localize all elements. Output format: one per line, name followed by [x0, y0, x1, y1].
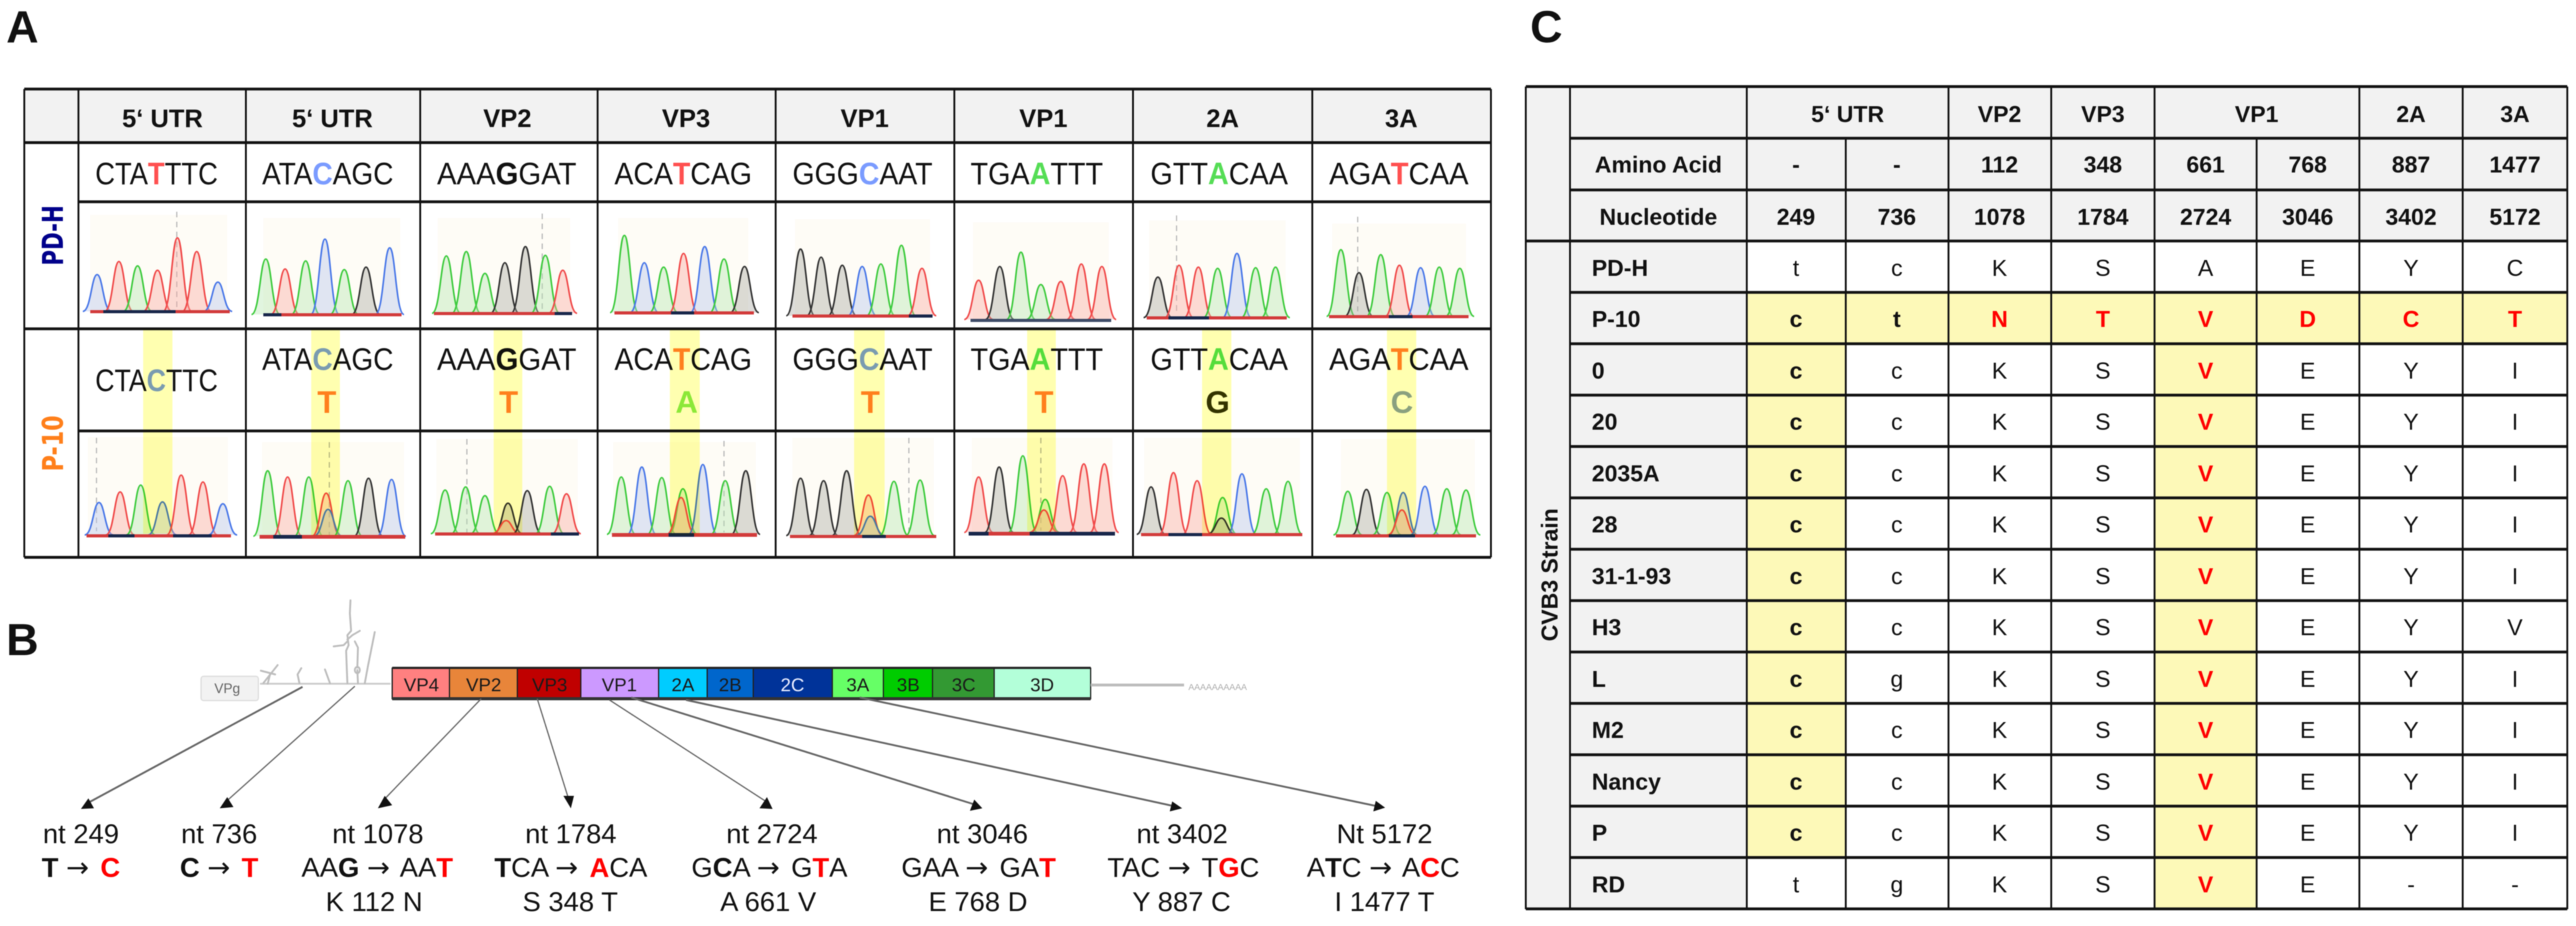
row 31-1-93: K [1992, 564, 2008, 589]
row L: V [2198, 666, 2214, 692]
chromatogram PD-H VP1 nt 2724 [786, 219, 936, 318]
row P: I [2512, 820, 2518, 846]
column headers: 2A [1206, 104, 1239, 133]
mutation nt 2724: nt 2724 [726, 819, 817, 849]
nucleotide row: 3046 [2282, 204, 2333, 230]
mutation nt 3046: nt 3046 [937, 819, 1028, 849]
P-10 substituted bases: T [499, 385, 518, 420]
mutation nt 3046: E 768 D [929, 887, 1027, 917]
row P-10: N [1991, 306, 2008, 332]
chromatogram P-10 VP1 nt 3046 [964, 438, 1119, 536]
nucleotide row: 2724 [2180, 204, 2232, 230]
row 0: V [2198, 358, 2214, 384]
amino acid row [1595, 152, 2541, 177]
row 31-1-93: Y [2404, 564, 2419, 589]
amino acid row: 1477 [2489, 152, 2541, 177]
mutation nt 736: nt 736 [181, 819, 257, 849]
row H3: V [2508, 615, 2523, 640]
row 28: Y [2404, 512, 2419, 537]
row 0: c [1790, 358, 1802, 384]
row 31-1-93: 31-1-93 [1592, 564, 1671, 589]
chromatogram P-10 VP3 [607, 441, 760, 537]
panel C: strain comparison table [1526, 2, 2567, 909]
arrow nt 3046 [631, 697, 982, 811]
row 0: c [1891, 358, 1902, 384]
row 31-1-93: E [2300, 564, 2315, 589]
row 31-1-93: c [1891, 564, 1902, 589]
PD-H sequences: CTATTTC [95, 156, 218, 191]
table C grid lines [1526, 87, 2567, 909]
mutation nt 249: nt 249 [43, 819, 119, 849]
row Nancy: S [2095, 769, 2110, 795]
polyprotein genome bar: VP3 [532, 675, 567, 696]
row 2035A: S [2095, 461, 2110, 486]
row P: V [2198, 820, 2214, 846]
row 0: E [2300, 358, 2315, 384]
amino acid row: Amino Acid [1595, 152, 1722, 177]
PD-H sequences: TGAATTT [971, 156, 1103, 191]
PD-H sequences: GTTACAA [1150, 156, 1289, 191]
mutation nt 1784: nt 1784 [525, 819, 616, 849]
mutation nt 5172: Nt 5172 [1337, 819, 1432, 849]
column headers: 3A [1385, 104, 1417, 133]
panel letter C: C [1530, 2, 1563, 52]
row 0: S [2095, 358, 2110, 384]
row M2 [1592, 717, 2518, 743]
VPg box [201, 676, 258, 701]
row PD-H: S [2095, 255, 2110, 281]
chromatogram PD-H VP3 [610, 218, 759, 314]
row 2035A: E [2300, 461, 2315, 486]
arrow nt 2724 [609, 700, 773, 809]
chromatogram P-10 VP2 [431, 439, 581, 536]
row RD [1592, 872, 2519, 897]
row H3: E [2300, 615, 2315, 640]
row H3: V [2198, 615, 2214, 640]
chromatogram PD-H 5'UTR nt 736 [251, 218, 404, 316]
column headers: VP2 [483, 104, 532, 133]
row 31-1-93: c [1790, 564, 1802, 589]
row Nancy: E [2300, 769, 2315, 795]
row 2035A: c [1790, 461, 1802, 486]
row L: E [2300, 666, 2315, 692]
row P-10: C [2403, 306, 2419, 332]
row PD-H: t [1793, 255, 1800, 281]
row P-10 [1592, 306, 2522, 332]
arrow nt 1784 [537, 699, 574, 808]
P-10 sequences: CTACTTC [95, 363, 218, 398]
gene region header row: VP3 [2081, 102, 2125, 127]
polyprotein genome bar: VP2 [466, 675, 501, 696]
amino acid row: - [1792, 152, 1800, 177]
arrow nt 3402 [686, 700, 1182, 811]
amino acid row: 661 [2186, 152, 2225, 177]
row 2035A: c [1891, 461, 1902, 486]
row 28: K [1992, 512, 2008, 537]
row RD: E [2300, 872, 2315, 897]
mutation nt 1078: nt 1078 [332, 819, 423, 849]
column headers: VP1 [840, 104, 889, 133]
row L: S [2095, 666, 2110, 692]
nucleotide row: 736 [1878, 204, 1916, 230]
row Nancy: c [1790, 769, 1802, 795]
row label P-10: P-10 [36, 415, 70, 471]
row P-10: t [1893, 306, 1901, 332]
row 31-1-93: S [2095, 564, 2110, 589]
vertical label CVB3 Strain: CVB3 Strain [1537, 508, 1563, 641]
gene region header row: 5ʻ UTR [1811, 102, 1884, 127]
row 28: V [2198, 512, 2214, 537]
polyprotein genome bar: 3C [952, 675, 975, 696]
mutation nt 1784: S 348 T [522, 887, 618, 917]
nucleotide row: 249 [1777, 204, 1815, 230]
row M2: V [2198, 717, 2214, 743]
row PD-H [1592, 255, 2523, 281]
PD-H sequences: AGATCAA [1329, 156, 1469, 191]
row PD-H: E [2300, 255, 2315, 281]
row PD-H: K [1992, 255, 2008, 281]
row Nancy: Nancy [1592, 769, 1661, 795]
column headers [122, 104, 1417, 133]
chromatogram P-10 5'UTR nt 249 [85, 437, 237, 537]
mutation nt 736 [180, 819, 258, 884]
row M2: c [1790, 717, 1802, 743]
table C shaded backgrounds [1526, 87, 2567, 909]
P-10 substituted bases: T [317, 385, 336, 420]
nucleotide row: 3402 [2386, 204, 2437, 230]
row L: L [1592, 666, 1606, 692]
panel letter A: A [6, 2, 39, 52]
amino acid row: 112 [1981, 152, 2018, 177]
row 0: K [1992, 358, 2008, 384]
mutation nt 1078: AAG → AAT [301, 852, 453, 884]
P-10 substituted bases: T [1035, 385, 1053, 420]
gene region header row: 2A [2396, 102, 2426, 127]
column headers: VP1 [1019, 104, 1068, 133]
gene region header row: VP2 [1978, 102, 2021, 127]
row 20: E [2300, 409, 2315, 435]
row P-10: V [2198, 306, 2214, 332]
mutation nt 2724 [692, 819, 848, 917]
nucleotide row: 1078 [1974, 204, 2025, 230]
row H3: Y [2404, 615, 2419, 640]
row P: c [1891, 820, 1902, 846]
row P: E [2300, 820, 2315, 846]
row PD-H: PD-H [1592, 255, 1648, 281]
row 31-1-93: V [2198, 564, 2214, 589]
row L: K [1992, 666, 2008, 692]
mutation nt 3402: Y 887 C [1132, 887, 1231, 917]
5' UTR stem loops [261, 600, 390, 684]
row 0: Y [2404, 358, 2419, 384]
row RD: g [1891, 872, 1903, 897]
row P-10: D [2300, 306, 2316, 332]
arrow nt 1078 [378, 699, 481, 808]
PD-H sequences: GGGCAAT [792, 156, 933, 191]
row P: Y [2404, 820, 2419, 846]
chromatogram PD-H 3A [1327, 217, 1474, 318]
PD-H sequences [95, 156, 1469, 191]
row RD: - [2511, 872, 2519, 897]
VPg box: VPg [214, 681, 240, 696]
row L: c [1790, 666, 1802, 692]
3' tail with poly-A: AAAAAAAAAA [1188, 682, 1248, 692]
row P-10: T [2508, 306, 2522, 332]
polyprotein genome bar [392, 668, 1091, 699]
row P: S [2095, 820, 2110, 846]
row P: P [1592, 820, 1607, 846]
row 31-1-93 [1592, 564, 2518, 589]
row M2: E [2300, 717, 2315, 743]
chromatogram PD-H VP1 nt 3046 [964, 222, 1116, 322]
row 28: c [1891, 512, 1902, 537]
mutation nt 1078 [301, 819, 453, 917]
amino acid row: - [1893, 152, 1901, 177]
column headers: VP3 [662, 104, 710, 133]
row H3 [1592, 615, 2523, 640]
row 28: I [2512, 512, 2518, 537]
P-10 sequences: AGATCAA [1329, 342, 1469, 377]
row 28: E [2300, 512, 2315, 537]
P-10 substituted bases: C [1391, 385, 1413, 420]
mutation nt 1784 [494, 819, 648, 917]
panel B: genome map and mutations [6, 600, 1460, 917]
row M2: S [2095, 717, 2110, 743]
row 28: 28 [1592, 512, 1617, 537]
P-10 sequences: TGAATTT [971, 342, 1103, 377]
table A header background [24, 89, 1491, 143]
P-10 sequences: GGGCAAT [792, 342, 933, 377]
mutation nt 249: T → C [42, 852, 120, 884]
row 20: S [2095, 409, 2110, 435]
polyprotein genome bar: VP4 [404, 675, 439, 696]
mutation nt 3046: GAA → GAT [901, 852, 1056, 884]
polyprotein genome bar: 2B [719, 675, 741, 696]
chromatogram PD-H 2A [1144, 215, 1290, 319]
mutation nt 2724: GCA → GTA [692, 852, 848, 884]
chromatogram P-10 2A [1137, 438, 1302, 536]
arrow nt 736 [220, 686, 355, 808]
P-10 sequences: ACATCAG [614, 342, 752, 377]
row 2035A [1592, 461, 2518, 486]
chromatogram PD-H VP2 [432, 214, 577, 315]
row 20: V [2198, 409, 2214, 435]
amino acid row: 768 [2288, 152, 2327, 177]
row P: K [1992, 820, 2008, 846]
row Nancy: c [1891, 769, 1902, 795]
row 2035A: V [2198, 461, 2214, 486]
P-10 substituted bases [317, 385, 1413, 420]
row L: I [2512, 666, 2518, 692]
polyprotein genome bar: 2A [672, 675, 694, 696]
column headers: 5ʻ UTR [122, 104, 203, 133]
nucleotide row [1599, 204, 2541, 230]
mutation nt 1784: TCA → ACA [494, 852, 648, 884]
mutation nt 1078: K 112 N [326, 887, 423, 917]
mutation nt 5172 [1307, 819, 1460, 917]
row M2: M2 [1592, 717, 1624, 743]
panel A: sequencing chromatograms [6, 2, 1491, 557]
row 2035A: Y [2404, 461, 2419, 486]
row RD: t [1793, 872, 1800, 897]
table A grid lines [24, 89, 1491, 557]
mutation nt 3402 [1107, 819, 1259, 917]
mutation nt 2724: A 661 V [720, 887, 817, 917]
row H3: K [1992, 615, 2008, 640]
P-10 sequences: AAAGGAT [437, 342, 576, 377]
mutation nt 736: C → T [180, 852, 258, 884]
row 20: c [1790, 409, 1802, 435]
row 20: c [1891, 409, 1902, 435]
row H3: H3 [1592, 615, 1621, 640]
row M2: K [1992, 717, 2008, 743]
amino acid row: 348 [2084, 152, 2122, 177]
row 20: K [1992, 409, 2008, 435]
mutation nt 5172: I 1477 T [1335, 887, 1434, 917]
row M2: I [2512, 717, 2518, 743]
row 2035A: I [2512, 461, 2518, 486]
row H3: S [2095, 615, 2110, 640]
row P: c [1790, 820, 1802, 846]
row Nancy: K [1992, 769, 2008, 795]
nucleotide row: Nucleotide [1599, 204, 1718, 230]
gene region header row: VP1 [2235, 102, 2278, 127]
nucleotide row: 1784 [2077, 204, 2129, 230]
polyprotein genome bar: 2C [781, 675, 804, 696]
row 20: Y [2404, 409, 2419, 435]
row P [1592, 820, 2518, 846]
nucleotide row: 5172 [2489, 204, 2541, 230]
arrow nt 5172 [860, 697, 1385, 811]
row 28 [1592, 512, 2518, 537]
row 0 [1592, 358, 2518, 384]
amino acid row: 887 [2392, 152, 2430, 177]
row P-10: P-10 [1592, 306, 1640, 332]
chromatogram P-10 3A [1333, 439, 1480, 537]
P-10 sequences: GTTACAA [1150, 342, 1289, 377]
row L: Y [2404, 666, 2419, 692]
P-10 sequences: ATACAGC [262, 342, 393, 377]
row P-10: c [1790, 306, 1802, 332]
row 2035A: 2035A [1592, 461, 1660, 486]
row label PD-H: PD-H [36, 206, 70, 265]
row M2: Y [2404, 717, 2419, 743]
row PD-H: Y [2404, 255, 2419, 281]
row H3: c [1891, 615, 1902, 640]
PD-H sequences: ACATCAG [614, 156, 752, 191]
P-10 substituted bases: A [675, 385, 698, 420]
row 0: I [2512, 358, 2518, 384]
P-10 substituted bases: G [1206, 385, 1229, 420]
row PD-H: A [2198, 255, 2214, 281]
column headers: 5ʻ UTR [292, 104, 373, 133]
polyprotein genome bar: 3D [1030, 675, 1054, 696]
polyprotein genome bar: 3A [847, 675, 869, 696]
row 28: c [1790, 512, 1802, 537]
chromatogram P-10 VP1 nt 2724 [786, 438, 936, 538]
PD-H sequences: AAAGGAT [437, 156, 576, 191]
arrow nt 249 [81, 687, 303, 809]
row Nancy: V [2198, 769, 2214, 795]
mutation nt 249 [42, 819, 120, 884]
mutation nt 3402: TAC → TGC [1107, 852, 1259, 884]
row 2035A: K [1992, 461, 2008, 486]
gene region header row [1811, 102, 2530, 127]
polyprotein genome bar: VP1 [602, 675, 637, 696]
row RD: V [2198, 872, 2214, 897]
row 0: 0 [1592, 358, 1605, 384]
P-10 substituted bases: T [861, 385, 880, 420]
row H3: c [1790, 615, 1802, 640]
row P-10: T [2096, 306, 2110, 332]
row PD-H: c [1891, 255, 1902, 281]
row Nancy: I [2512, 769, 2518, 795]
row Nancy [1592, 769, 2518, 795]
row 20: 20 [1592, 409, 1617, 435]
panel letter B: B [6, 615, 39, 665]
mutation nt 3046 [901, 819, 1056, 917]
row 20 [1592, 409, 2518, 435]
mutation nt 5172: ATC → ACC [1307, 852, 1460, 884]
row Nancy: Y [2404, 769, 2419, 795]
row L: g [1891, 666, 1903, 692]
row PD-H: C [2507, 255, 2523, 281]
chromatogram PD-H 5'UTR nt 249 [83, 212, 232, 313]
row RD: RD [1592, 872, 1625, 897]
PD-H sequences: ATACAGC [262, 156, 393, 191]
P-10 sequences [95, 342, 1469, 398]
row M2: c [1891, 717, 1902, 743]
yellow mutation highlight bands [143, 329, 1416, 536]
row 28: S [2095, 512, 2110, 537]
row L [1592, 666, 2518, 692]
polyprotein genome bar: 3B [897, 675, 919, 696]
row RD: - [2407, 872, 2415, 897]
row 31-1-93: I [2512, 564, 2518, 589]
row RD: S [2095, 872, 2110, 897]
row 20: I [2512, 409, 2518, 435]
row RD: K [1992, 872, 2008, 897]
chromatogram P-10 5'UTR nt 736 [253, 442, 406, 539]
mutation nt 3402: nt 3402 [1137, 819, 1228, 849]
gene region header row: 3A [2500, 102, 2530, 127]
